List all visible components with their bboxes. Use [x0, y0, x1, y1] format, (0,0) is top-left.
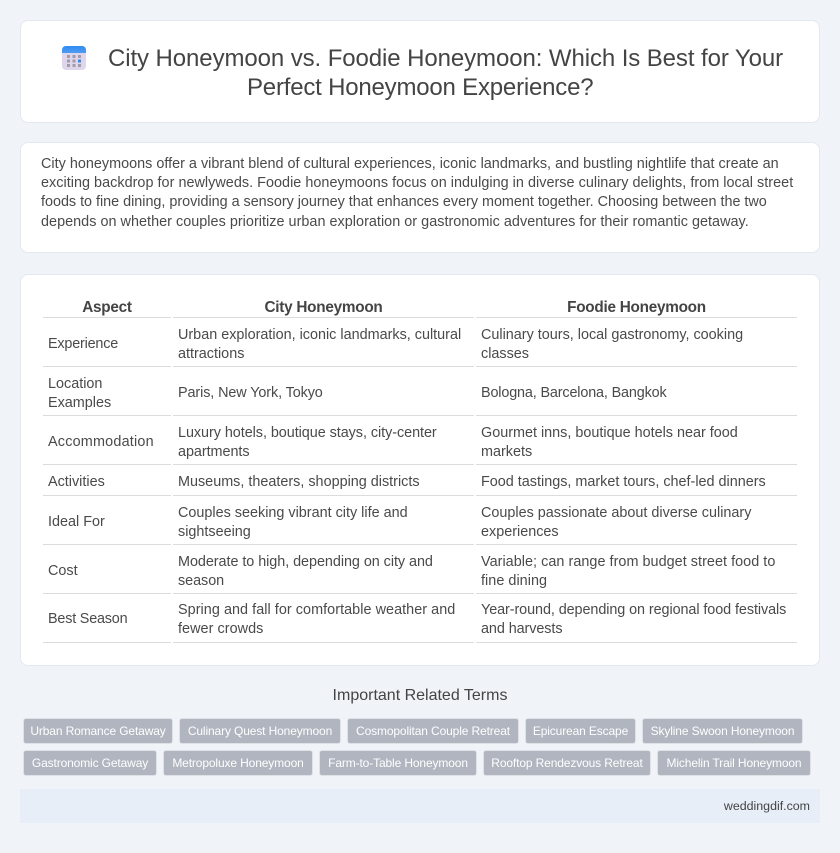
- tag: [23, 750, 157, 776]
- row: Accommodation: Luxury hotels, boutique stays, city-center: [178, 425, 437, 441]
- row: Experience: attractions: [178, 346, 244, 362]
- header: Foodie Honeymoon: Foodie Honeymoon: [567, 299, 706, 316]
- footer bar: [20, 789, 820, 823]
- row: Best Season: Year-round, depending on regional food festivals: [481, 602, 786, 618]
- row: Best Season: fewer crowds: [178, 620, 263, 636]
- title: City Honeymoon vs. Foodie Honeymoon: Which Is Best for Your: [108, 45, 783, 72]
- row: Experience: classes: [481, 346, 529, 362]
- tag: Cosmopolitan Couple Retreat: [356, 724, 510, 738]
- row: Experience: Experience: [48, 336, 118, 352]
- tag: [179, 718, 341, 744]
- tag: [642, 718, 803, 744]
- title: [108, 45, 783, 101]
- tag: Farm-to-Table Honeymoon: [328, 756, 468, 770]
- row: Ideal For: Couples seeking vibrant city life and: [178, 505, 408, 521]
- row: Activities: Activities: [48, 474, 105, 490]
- tag: [319, 750, 477, 776]
- header: Aspect: Aspect: [82, 299, 132, 316]
- row: Accommodation: Accommodation: [48, 434, 154, 450]
- tag: [525, 718, 636, 744]
- tag: Urban Romance Getaway: [30, 724, 166, 738]
- tag: [657, 750, 811, 776]
- related terms tags: [23, 718, 811, 776]
- tag: Gastronomic Getaway: [32, 756, 148, 770]
- tag: Epicurean Escape: [533, 724, 628, 738]
- intro text: City honeymoons offer a vibrant blend of cultural experiences, iconic landmarks, and bustling nightlife that create an: [41, 156, 779, 172]
- row: Location Examples: Examples: [48, 394, 111, 410]
- row: Experience: Culinary tours, local gastronomy, cooking: [481, 327, 743, 343]
- row: Location Examples: [48, 376, 667, 410]
- row: Ideal For: [48, 505, 752, 540]
- icon: calendar: [62, 46, 86, 70]
- row: Experience: [48, 327, 743, 362]
- row: Location Examples: Paris, New York, Tokyo: [178, 385, 323, 401]
- footer source text: weddingdif.com: [724, 799, 810, 813]
- row: Ideal For: Ideal For: [48, 514, 105, 530]
- intro text: [41, 156, 794, 230]
- row: Accommodation: apartments: [178, 444, 250, 460]
- row: Cost: [48, 554, 775, 588]
- row: Best Season: Spring and fall for comfortable weather and: [178, 602, 455, 618]
- row: Activities: [48, 474, 766, 490]
- intro text: exciting backdrop for newlyweds. Foodie honeymoons focus on indulging in diverse culinary delights, from local street: [41, 175, 793, 191]
- row: Cost: fine dining: [481, 572, 547, 588]
- tag: [347, 718, 519, 744]
- panel: intro text card: [20, 142, 820, 253]
- intro text: foods to fine dining, providing a sensory journey that enhances every moment together. Choosing between the two: [41, 194, 767, 210]
- tag: Michelin Trail Honeymoon: [667, 756, 801, 770]
- row: Activities: Museums, theaters, shopping districts: [178, 474, 420, 490]
- related terms heading: Important Related Terms: [333, 687, 507, 704]
- row: Activities: Food tastings, market tours, chef-led dinners: [481, 474, 766, 490]
- row: Best Season: [48, 602, 786, 636]
- row: Experience: Urban exploration, iconic landmarks, cultural: [178, 327, 461, 343]
- row: Accommodation: [48, 425, 738, 460]
- intro text: depends on whether couples prioritize urban exploration or gastronomic adventures for their romantic getaway.: [41, 214, 749, 230]
- tag: [483, 750, 651, 776]
- row: Best Season: and harvests: [481, 620, 562, 636]
- row: Cost: Variable; can range from budget street food to: [481, 554, 775, 570]
- row: Accommodation: Gourmet inns, boutique hotels near food: [481, 425, 738, 441]
- panel: comparison table card: [20, 274, 820, 666]
- tag: [163, 750, 313, 776]
- row: Ideal For: experiences: [481, 524, 559, 540]
- row: Ideal For: sightseeing: [178, 524, 251, 540]
- tag: Rooftop Rendezvous Retreat: [491, 756, 643, 770]
- row: Cost: Moderate to high, depending on city and: [178, 554, 433, 570]
- row: Cost: Cost: [48, 563, 78, 579]
- header: City Honeymoon: City Honeymoon: [264, 299, 383, 316]
- panel: title card: [20, 20, 820, 123]
- title: Perfect Honeymoon Experience?: [247, 74, 593, 101]
- tag: Culinary Quest Honeymoon: [188, 724, 332, 738]
- row: Ideal For: Couples passionate about diverse culinary: [481, 505, 751, 521]
- row: Best Season: Best Season: [48, 611, 127, 627]
- tag: Skyline Swoon Honeymoon: [651, 724, 794, 738]
- row: Location Examples: Bologna, Barcelona, Bangkok: [481, 385, 667, 401]
- row: Accommodation: markets: [481, 444, 532, 460]
- row: Location Examples: Location: [48, 376, 102, 392]
- tag: [23, 718, 173, 744]
- row: Cost: season: [178, 572, 224, 588]
- tag: Metropoluxe Honeymoon: [172, 756, 304, 770]
